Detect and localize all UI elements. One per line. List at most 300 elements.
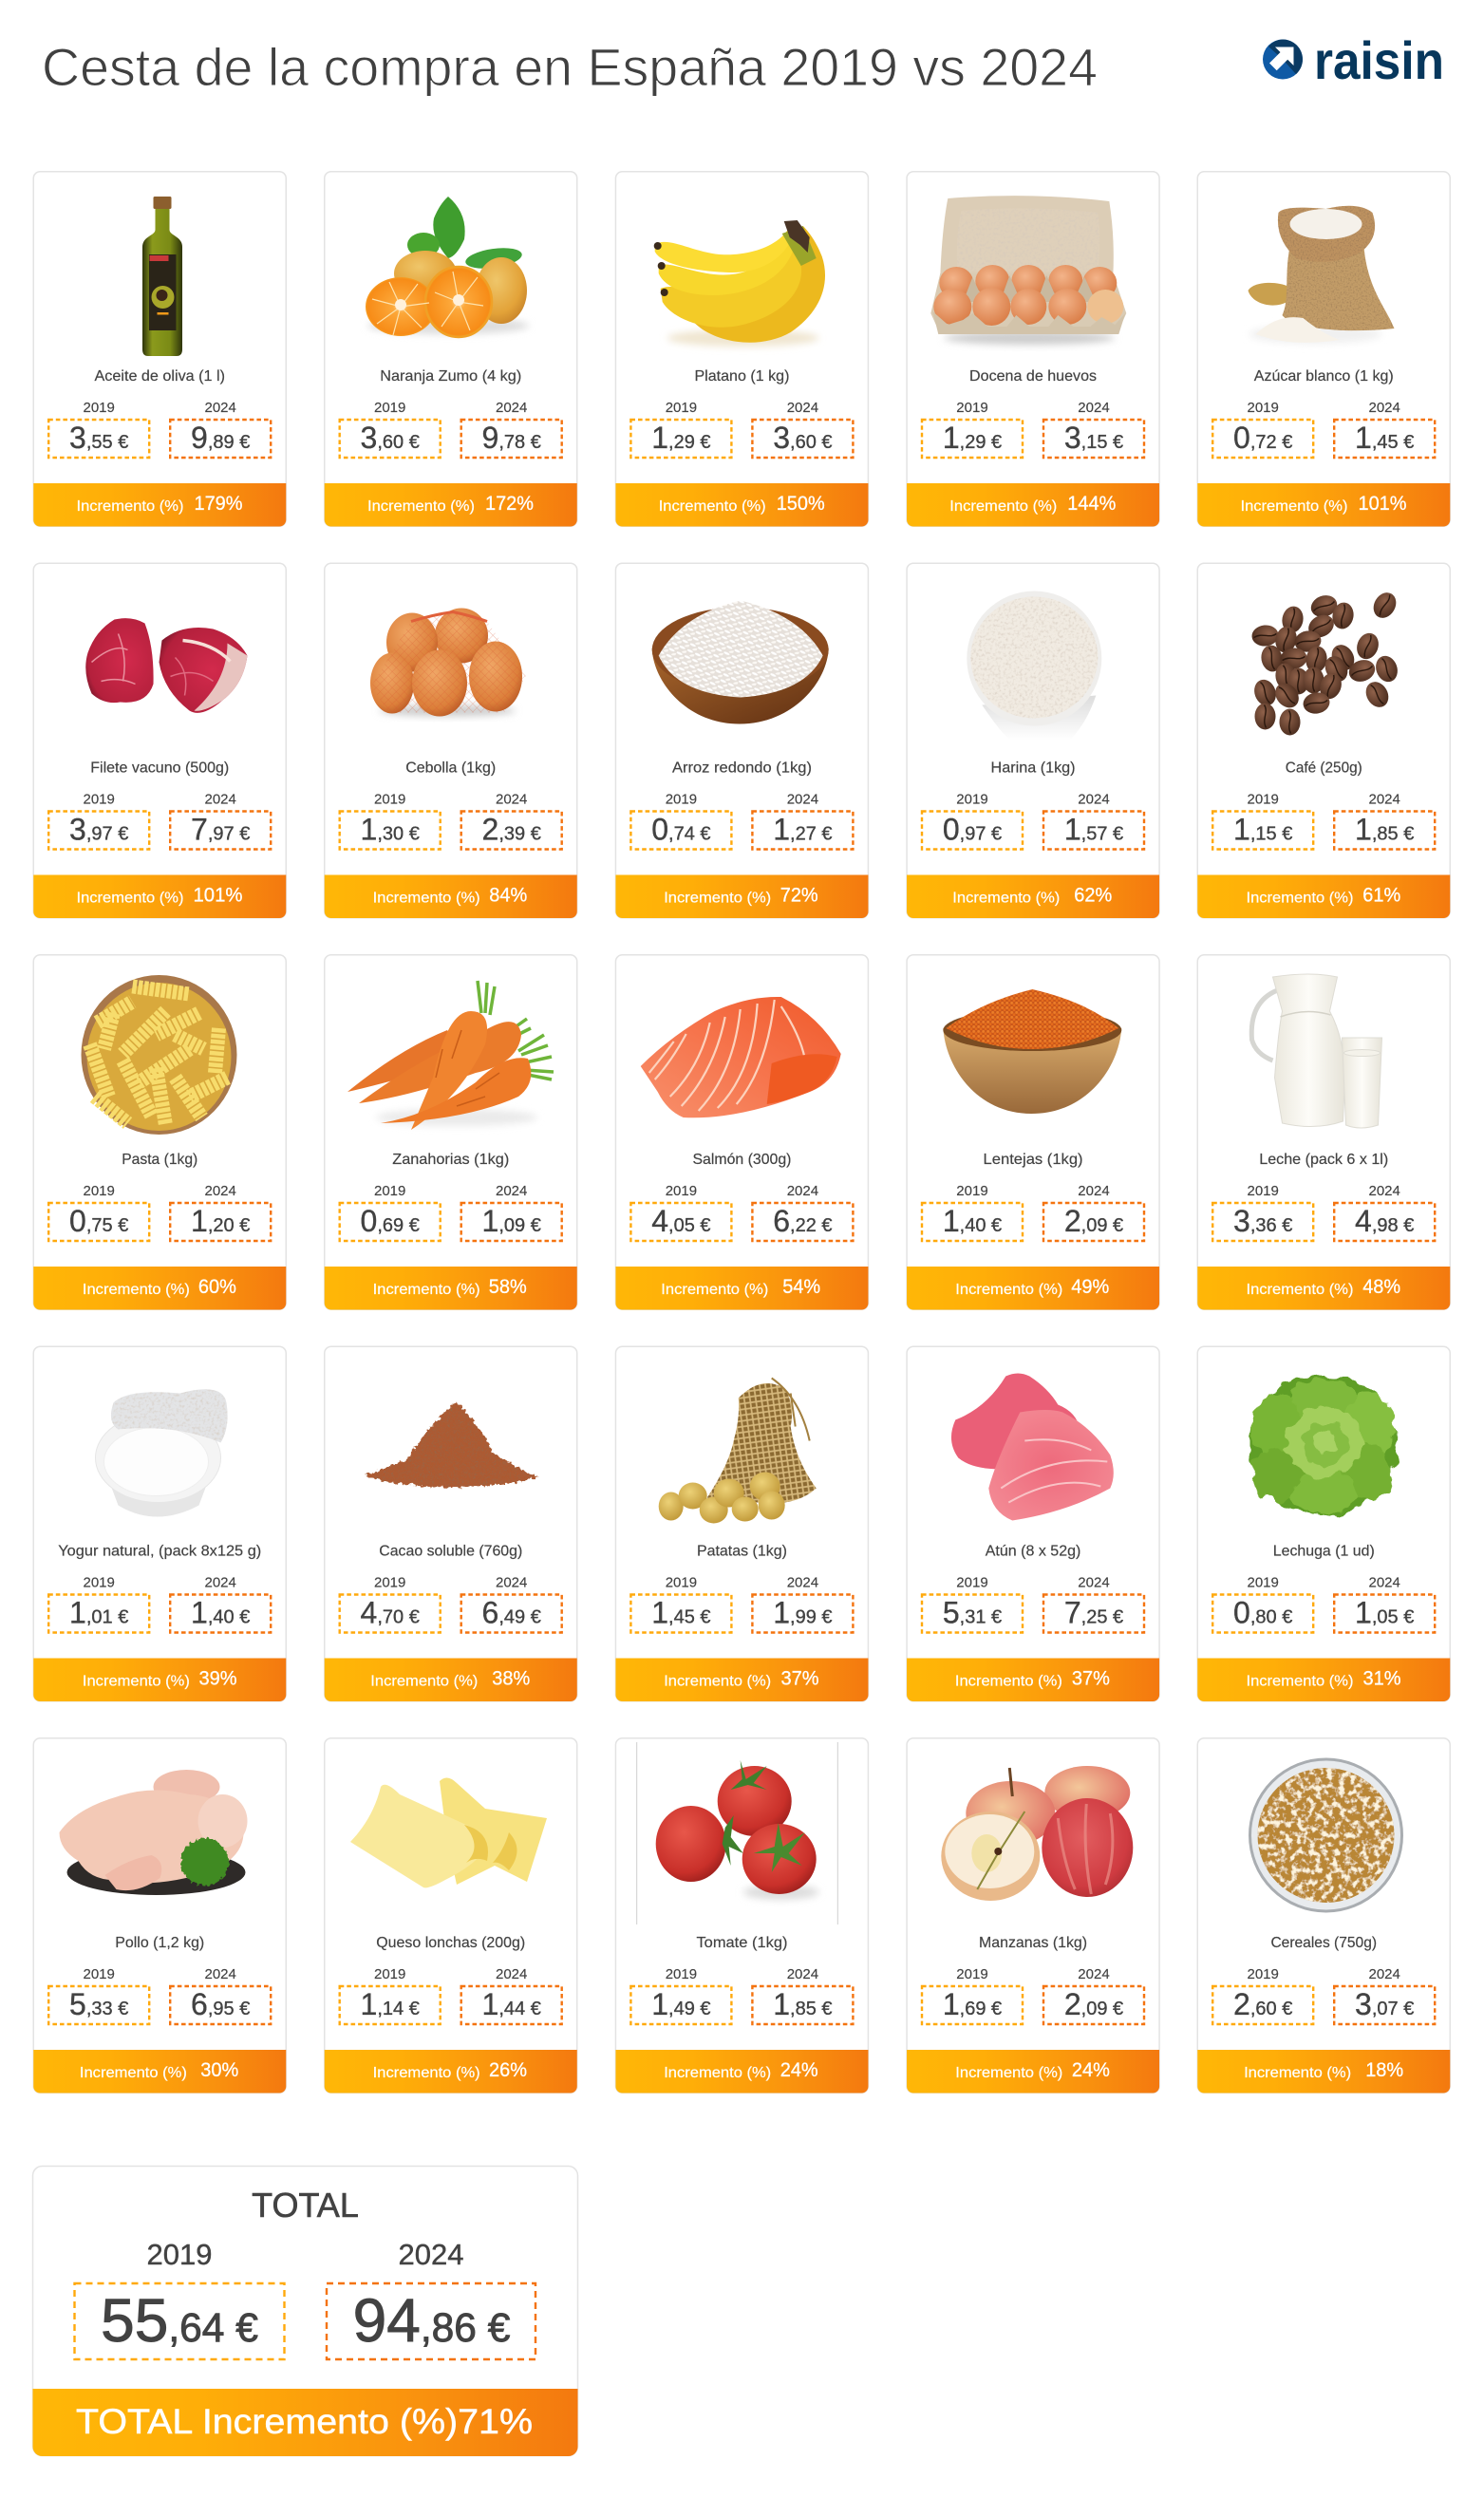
price 2024: 2,09 €: [1064, 1987, 1123, 2021]
card: Queso lonchas: [325, 1738, 577, 2093]
increment bar: Incremento (%): [373, 891, 480, 906]
increment bar: [615, 2050, 868, 2093]
increment bar: Incremento (%): [949, 498, 1057, 515]
icon: salmon fillet: [641, 997, 841, 1117]
price 2024: [170, 420, 271, 458]
price 2019: [340, 1203, 441, 1241]
card: Cebolla: [325, 563, 577, 918]
price 2024: 6,49 €: [482, 1595, 541, 1629]
price 2019: [922, 1595, 1023, 1633]
price 2024: [461, 420, 562, 458]
price 2024: 3,15 €: [1064, 421, 1123, 455]
product name: Tomate (1kg): [696, 1935, 787, 1951]
product name: Arroz redondo (1kg): [672, 760, 812, 777]
price 2019: [1212, 811, 1313, 849]
year 2024: 2024: [1078, 1966, 1110, 1982]
product name: Yogur natural, (pack 8x125 g): [58, 1544, 261, 1559]
total year 2024: 2024: [399, 2238, 463, 2271]
icon: carrots: [348, 981, 554, 1130]
price 2019: [340, 420, 441, 458]
increment bar: [325, 1658, 577, 1701]
price 2019: [922, 420, 1023, 458]
price 2019: 3,97 €: [69, 813, 128, 847]
icon: coffee beans: [1250, 589, 1401, 735]
price 2019: [48, 1986, 149, 2024]
total heading: TOTAL: [252, 2186, 359, 2225]
year 2024: 2024: [1078, 400, 1110, 416]
increment bar: Incremento (%): [661, 1282, 768, 1298]
year 2024: 2024: [1078, 792, 1110, 807]
product name: Azúcar blanco (1 kg): [1254, 368, 1394, 385]
card: Filete vacuno: [33, 563, 286, 918]
card: Arroz redondo: [615, 563, 868, 918]
price 2019: 3,55 €: [69, 421, 128, 455]
year 2024: 2024: [787, 792, 818, 807]
increment bar: [907, 1658, 1159, 1701]
year 2024: 2024: [787, 1966, 818, 1982]
product name: Platano (1 kg): [694, 368, 789, 385]
price 2019: 1,45 €: [651, 1595, 711, 1629]
year 2019: 2019: [1248, 792, 1279, 807]
price 2024: [1043, 1203, 1144, 1241]
increment bar: [615, 1267, 868, 1310]
card: Lechuga: [1197, 1346, 1450, 1701]
year 2024: 2024: [1369, 1966, 1400, 1982]
icon: rice bowl: [652, 600, 829, 723]
year 2024: 2024: [205, 1966, 236, 1982]
year 2024: 2024: [496, 1574, 527, 1591]
year 2024: 2024: [1078, 1574, 1110, 1591]
price 2024: 1,57 €: [1064, 813, 1123, 847]
total increment bar: TOTAL Incremento (%)71%: [76, 2402, 533, 2441]
icon: sugar sack: [1248, 206, 1394, 344]
price 2019: 1,69 €: [943, 1987, 1002, 2021]
year 2019: 2019: [666, 1183, 697, 1199]
price 2019: [922, 811, 1023, 849]
price 2024: 1,44 €: [482, 1987, 541, 2021]
total price 2019: [74, 2283, 285, 2359]
card: Manzanas: [907, 1738, 1159, 2093]
price 2019: [1212, 420, 1313, 458]
increment bar: 18%: [1365, 2059, 1403, 2081]
price 2019: 3,60 €: [361, 421, 420, 455]
price 2024: [170, 811, 271, 849]
total price 2024: [327, 2283, 535, 2359]
price 2019: 2,60 €: [1233, 1987, 1292, 2021]
price 2019: 0,74 €: [651, 813, 711, 847]
increment bar: Incremento (%): [955, 1282, 1062, 1298]
year 2019: 2019: [666, 792, 697, 807]
increment bar: 26%: [489, 2059, 527, 2081]
year 2019: 2019: [374, 1966, 405, 1982]
price 2024: [752, 1595, 853, 1633]
total price 2019: 55,64 €: [101, 2286, 258, 2355]
icon: raw chicken on plate: [59, 1770, 247, 1895]
increment bar: 24%: [780, 2059, 818, 2081]
increment bar: 101%: [194, 885, 243, 906]
price 2019: [1212, 1986, 1313, 2024]
icon: olive oil bottle: [142, 197, 182, 356]
increment bar: 101%: [1358, 493, 1407, 515]
card: Atún: [907, 1346, 1159, 1701]
increment bar: Incremento (%): [83, 1282, 190, 1298]
increment bar: Incremento (%): [659, 498, 766, 515]
title: Cesta de la compra en España 2019 vs 2024: [42, 37, 1098, 97]
card: Azúcar blanco: [1197, 172, 1450, 526]
price 2019: 1,40 €: [943, 1204, 1002, 1238]
year 2019: 2019: [1248, 400, 1279, 416]
year 2019: 2019: [956, 1966, 988, 1982]
increment bar: [325, 2050, 577, 2093]
year 2019: 2019: [666, 1966, 697, 1982]
year 2019: 2019: [84, 1966, 115, 1982]
year 2019: 2019: [1248, 1966, 1279, 1982]
year 2019: 2019: [374, 792, 405, 807]
increment bar: Incremento (%): [1246, 1673, 1354, 1690]
price 2019: [1212, 1595, 1313, 1633]
price 2019: [630, 811, 731, 849]
icon: tuna steaks: [951, 1373, 1114, 1521]
icon: onions in net: [370, 608, 526, 716]
price 2019: 1,30 €: [361, 813, 420, 847]
product name: Cebolla (1kg): [405, 760, 496, 777]
year 2019: 2019: [956, 1574, 988, 1591]
year 2019: 2019: [374, 400, 405, 416]
increment bar: 84%: [489, 885, 527, 906]
increment bar: [33, 483, 286, 526]
card: Leche: [1197, 955, 1450, 1310]
increment bar: 150%: [777, 493, 825, 515]
price 2019: [340, 811, 441, 849]
increment bar: [1197, 483, 1450, 526]
product name: Salmón (300g): [692, 1152, 791, 1168]
increment bar: 30%: [200, 2059, 238, 2081]
year 2019: 2019: [84, 1574, 115, 1591]
increment bar: 48%: [1362, 1276, 1400, 1298]
increment bar: Incremento (%): [1244, 2065, 1351, 2081]
product name: Atún (8 x 52g): [986, 1544, 1080, 1559]
price 2024: [170, 1595, 271, 1633]
increment bar: 49%: [1071, 1276, 1109, 1298]
product name: Pollo (1,2 kg): [115, 1935, 204, 1951]
price 2019: 1,01 €: [69, 1595, 128, 1629]
price 2019: [630, 1986, 731, 2024]
increment bar: [907, 483, 1159, 526]
price 2024: [170, 1203, 271, 1241]
product name: Zanahorias (1kg): [392, 1152, 509, 1168]
year 2019: 2019: [374, 1574, 405, 1591]
increment bar: 60%: [198, 1276, 236, 1298]
price 2019: 5,31 €: [943, 1595, 1002, 1629]
product name: Cacao soluble (760g): [379, 1544, 522, 1559]
total year 2019: 2019: [147, 2238, 212, 2271]
product name: Filete vacuno (500g): [90, 760, 229, 777]
icon: milk jug and glass: [1251, 974, 1382, 1128]
increment bar: 144%: [1067, 493, 1116, 515]
product name: Queso lonchas (200g): [376, 1935, 525, 1951]
price 2024: [752, 1986, 853, 2024]
price 2024: [1334, 420, 1435, 458]
price 2019: 3,36 €: [1233, 1204, 1292, 1238]
price 2024: [461, 811, 562, 849]
card: Patatas: [615, 1346, 868, 1701]
card: Salmón: [615, 955, 868, 1310]
price 2024: 1,40 €: [191, 1595, 250, 1629]
year 2024: 2024: [205, 1574, 236, 1591]
price 2019: [48, 811, 149, 849]
year 2024: 2024: [1369, 1183, 1400, 1199]
card: Café: [1197, 563, 1450, 918]
product name: Lentejas (1kg): [984, 1152, 1083, 1168]
year 2024: 2024: [496, 400, 527, 416]
year 2024: 2024: [1369, 792, 1400, 807]
icon: bananas: [654, 220, 825, 347]
year 2019: 2019: [84, 792, 115, 807]
icon: cocoa powder pile: [365, 1401, 537, 1487]
increment bar: Incremento (%): [1246, 891, 1354, 906]
year 2024: 2024: [1369, 1574, 1400, 1591]
card: Aceite de oliva: [33, 172, 286, 526]
price 2024: [1043, 811, 1144, 849]
price 2019: 0,80 €: [1233, 1595, 1292, 1629]
card: Docena de huevos: [907, 172, 1159, 526]
price 2019: [48, 1203, 149, 1241]
panel: TOTAL: [32, 2167, 577, 2456]
product name: Cereales (750g): [1270, 1935, 1377, 1951]
price 2024: 2,39 €: [482, 813, 541, 847]
price 2024: [170, 1986, 271, 2024]
price 2019: [340, 1595, 441, 1633]
price 2024: 1,27 €: [773, 813, 833, 847]
year 2019: 2019: [1248, 1574, 1279, 1591]
icon: fusilli pasta bowl: [82, 975, 237, 1135]
year 2024: 2024: [496, 1966, 527, 1982]
price 2024: 3,07 €: [1355, 1987, 1414, 2021]
increment bar: Incremento (%): [664, 891, 771, 906]
increment bar: Incremento (%): [664, 2065, 771, 2081]
product name: Manzanas (1kg): [979, 1935, 1087, 1951]
increment bar: [615, 483, 868, 526]
card: Tomate: [615, 1738, 868, 2093]
increment bar: Incremento (%): [370, 1673, 478, 1690]
price 2024: [1334, 1595, 1435, 1633]
year 2019: 2019: [374, 1183, 405, 1199]
price 2024: [752, 811, 853, 849]
increment bar: [615, 875, 868, 918]
price 2019: 4,05 €: [651, 1204, 711, 1238]
year 2024: 2024: [205, 1183, 236, 1199]
year 2019: 2019: [956, 1183, 988, 1199]
year 2019: 2019: [666, 400, 697, 416]
increment bar: [1197, 2050, 1450, 2093]
increment bar: 172%: [485, 493, 534, 515]
price 2024: 1,85 €: [773, 1987, 833, 2021]
increment bar: 39%: [199, 1667, 237, 1690]
price 2024: [1043, 1986, 1144, 2024]
product name: Aceite de oliva (1 l): [95, 368, 225, 385]
year 2024: 2024: [496, 792, 527, 807]
logo: raisin: [1263, 30, 1444, 90]
card: Yogur natural: [33, 1346, 286, 1701]
price 2024: [1043, 1595, 1144, 1633]
price 2024: 6,95 €: [191, 1987, 250, 2021]
increment bar: Incremento (%): [76, 498, 184, 515]
year 2024: 2024: [1078, 1183, 1110, 1199]
price 2019: [48, 420, 149, 458]
increment bar: 54%: [782, 1276, 820, 1298]
product name: Lechuga (1 ud): [1273, 1544, 1375, 1559]
increment bar: 179%: [194, 493, 243, 515]
increment bar: Incremento (%): [83, 1673, 190, 1690]
increment bar: [325, 1267, 577, 1310]
price 2019: 1,29 €: [651, 421, 711, 455]
year 2024: 2024: [787, 1183, 818, 1199]
increment bar: Incremento (%): [1240, 498, 1348, 515]
product name: Leche (pack 6 x 1l): [1259, 1152, 1388, 1168]
product name: Café (250g): [1286, 760, 1362, 777]
icon: lentil bowl: [943, 989, 1121, 1114]
year 2019: 2019: [956, 792, 988, 807]
icon: cheese slices: [350, 1777, 547, 1887]
increment bar: [907, 875, 1159, 918]
price 2024: 9,78 €: [482, 421, 541, 455]
price 2019: 0,72 €: [1233, 421, 1292, 455]
increment bar: Incremento (%): [80, 2065, 187, 2081]
price 2024: [752, 1203, 853, 1241]
increment bar: 58%: [489, 1276, 527, 1298]
price 2019: 4,70 €: [361, 1595, 420, 1629]
increment bar: 61%: [1362, 885, 1400, 906]
increment bar: Incremento (%): [664, 1673, 771, 1690]
price 2019: [1212, 1203, 1313, 1241]
price 2024: 1,45 €: [1355, 421, 1414, 455]
year 2024: 2024: [205, 400, 236, 416]
year 2024: 2024: [496, 1183, 527, 1199]
price 2019: 1,49 €: [651, 1987, 711, 2021]
increment bar: Incremento (%): [367, 498, 475, 515]
increment bar: [33, 1267, 286, 1310]
icon: egg carton: [930, 196, 1126, 345]
price 2024: [752, 420, 853, 458]
price 2019: [630, 420, 731, 458]
price 2019: 1,14 €: [361, 1987, 420, 2021]
price 2019: 0,69 €: [361, 1204, 420, 1238]
increment bar: Incremento (%): [955, 2065, 1062, 2081]
increment bar: [907, 1267, 1159, 1310]
total increment bar: [32, 2389, 577, 2456]
product name: Patatas (1kg): [697, 1544, 787, 1559]
price 2024: [461, 1203, 562, 1241]
card: Harina: [907, 563, 1159, 918]
price 2019: 5,33 €: [69, 1987, 128, 2021]
icon: tomatoes: [637, 1742, 837, 1924]
year 2019: 2019: [1248, 1183, 1279, 1199]
increment bar: [33, 2050, 286, 2093]
increment bar: [325, 483, 577, 526]
price 2019: 1,15 €: [1233, 813, 1292, 847]
year 2019: 2019: [956, 400, 988, 416]
card: Naranja Zumo: [325, 172, 577, 526]
icon: apples: [941, 1766, 1133, 1901]
increment bar: 38%: [492, 1667, 530, 1690]
product name: Naranja Zumo (4 kg): [380, 368, 521, 385]
price 2024: 2,09 €: [1064, 1204, 1123, 1238]
price 2019: 0,97 €: [943, 813, 1002, 847]
price 2019: [922, 1986, 1023, 2024]
increment bar: Incremento (%): [373, 2065, 480, 2081]
price 2024: 6,22 €: [773, 1204, 833, 1238]
increment bar: [325, 875, 577, 918]
increment bar: [1197, 1267, 1450, 1310]
total price 2024: 94,86 €: [353, 2286, 511, 2355]
price 2024: [1043, 420, 1144, 458]
increment bar: 31%: [1363, 1667, 1401, 1690]
price 2024: [1334, 1986, 1435, 2024]
price 2019: 1,29 €: [943, 421, 1002, 455]
price 2024: 9,89 €: [191, 421, 250, 455]
price 2019: [340, 1986, 441, 2024]
price 2024: 1,05 €: [1355, 1595, 1414, 1629]
year 2019: 2019: [666, 1574, 697, 1591]
product name: Harina (1kg): [991, 760, 1076, 777]
price 2024: 7,25 €: [1064, 1595, 1123, 1629]
price 2024: 4,98 €: [1355, 1204, 1414, 1238]
increment bar: [1197, 1658, 1450, 1701]
icon: flour bowl: [967, 591, 1101, 741]
price 2024: 1,85 €: [1355, 813, 1414, 847]
price 2019: [922, 1203, 1023, 1241]
price 2019: 0,75 €: [69, 1204, 128, 1238]
product name: Docena de huevos: [969, 368, 1097, 385]
icon: potato sack: [659, 1379, 817, 1523]
card: Cereales: [1197, 1738, 1450, 2093]
icon: lettuce: [1249, 1375, 1398, 1515]
increment bar: [907, 2050, 1159, 2093]
increment bar: 24%: [1072, 2059, 1110, 2081]
icon: oranges: [366, 197, 529, 337]
increment bar: 72%: [780, 885, 818, 906]
card: Pasta: [33, 955, 286, 1310]
price 2024: 1,99 €: [773, 1595, 833, 1629]
price 2019: [48, 1595, 149, 1633]
increment bar: [1197, 875, 1450, 918]
icon: cereal bowl: [1249, 1759, 1401, 1911]
price 2019: [630, 1595, 731, 1633]
increment bar: [33, 875, 286, 918]
year 2019: 2019: [84, 1183, 115, 1199]
price 2024: [461, 1595, 562, 1633]
price 2024: 3,60 €: [773, 421, 833, 455]
price 2024: 7,97 €: [191, 813, 250, 847]
logo: raisin: raisin: [1314, 30, 1444, 90]
icon: yogurt cup: [95, 1389, 228, 1517]
year 2024: 2024: [787, 1574, 818, 1591]
card: Lentejas: [907, 955, 1159, 1310]
product name: Pasta (1kg): [122, 1152, 197, 1168]
increment bar: Incremento (%): [76, 891, 184, 906]
year 2024: 2024: [1369, 400, 1400, 416]
increment bar: Incremento (%): [373, 1282, 480, 1298]
increment bar: 62%: [1074, 885, 1112, 906]
price 2024: [1334, 811, 1435, 849]
price 2024: [1334, 1203, 1435, 1241]
year 2024: 2024: [205, 792, 236, 807]
price 2019: [630, 1203, 731, 1241]
year 2024: 2024: [787, 400, 818, 416]
card: Zanahorias: [325, 955, 577, 1310]
increment bar: 37%: [781, 1667, 819, 1690]
card: Pollo: [33, 1738, 286, 2093]
